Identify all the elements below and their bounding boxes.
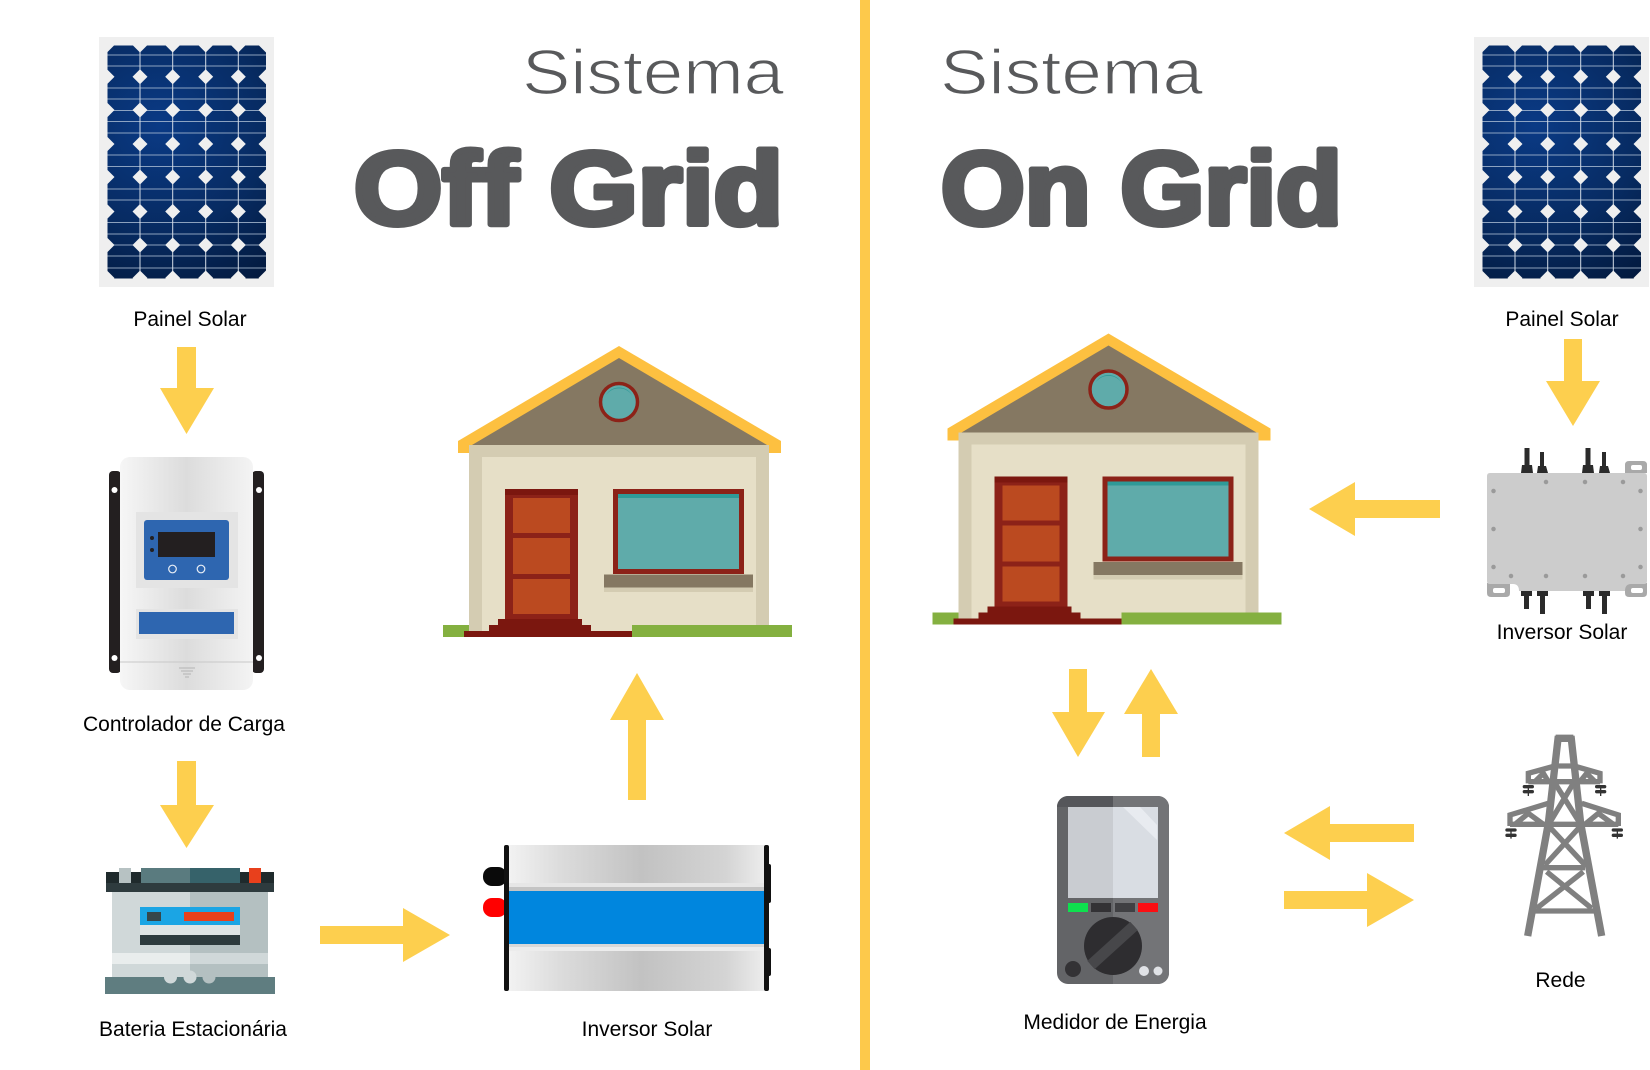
- arrow: inverter to house: [1309, 482, 1440, 536]
- panel: off grid: [83, 37, 792, 1041]
- label: Inversor Solar: Inversor Solar: [582, 1018, 712, 1041]
- icon: energy meter: [1057, 796, 1169, 984]
- arrow: battery to inverter: [320, 908, 450, 962]
- heading: Sistema: Sistema: [940, 38, 1204, 108]
- heading: On Grid: On Grid: [941, 131, 1342, 246]
- label: Bateria Estacionária: Bateria Estacionária: [99, 1018, 287, 1041]
- arrow: panel to controller: [160, 347, 214, 434]
- arrow: inverter to house: [610, 673, 664, 800]
- icon: charge controller: [109, 457, 264, 690]
- arrow: panel to inverter: [1546, 339, 1600, 426]
- label: Painel Solar: Painel Solar: [1505, 308, 1619, 331]
- label: Medidor de Energia: Medidor de Energia: [1023, 1011, 1207, 1034]
- vertical divider: [860, 0, 870, 1070]
- icon: inverter: [483, 845, 771, 991]
- panel: on grid: [932, 37, 1649, 1034]
- icon: house: [932, 334, 1282, 624]
- icon: solar panel: [99, 37, 274, 287]
- icon: battery: [105, 868, 275, 994]
- arrow: controller to battery: [160, 761, 214, 848]
- icon: micro inverter: [1487, 448, 1647, 614]
- icon: transmission tower: [1507, 736, 1621, 936]
- on grid title: [940, 38, 1342, 246]
- heading: Sistema: Sistema: [522, 38, 785, 108]
- arrow: house to meter: [1052, 669, 1105, 757]
- arrow: meter to grid: [1284, 873, 1414, 927]
- icon: house: [443, 346, 792, 637]
- label: Controlador de Carga: Controlador de Carga: [83, 713, 285, 736]
- arrow: grid to meter: [1284, 806, 1414, 860]
- off grid title: [354, 38, 785, 246]
- label: Inversor Solar: Inversor Solar: [1497, 621, 1627, 644]
- heading: Off Grid: Off Grid: [354, 131, 783, 246]
- label: Painel Solar: Painel Solar: [133, 308, 247, 331]
- label: Rede: Rede: [1535, 969, 1586, 992]
- arrow: meter to house: [1124, 669, 1178, 757]
- icon: solar panel: [1474, 37, 1649, 287]
